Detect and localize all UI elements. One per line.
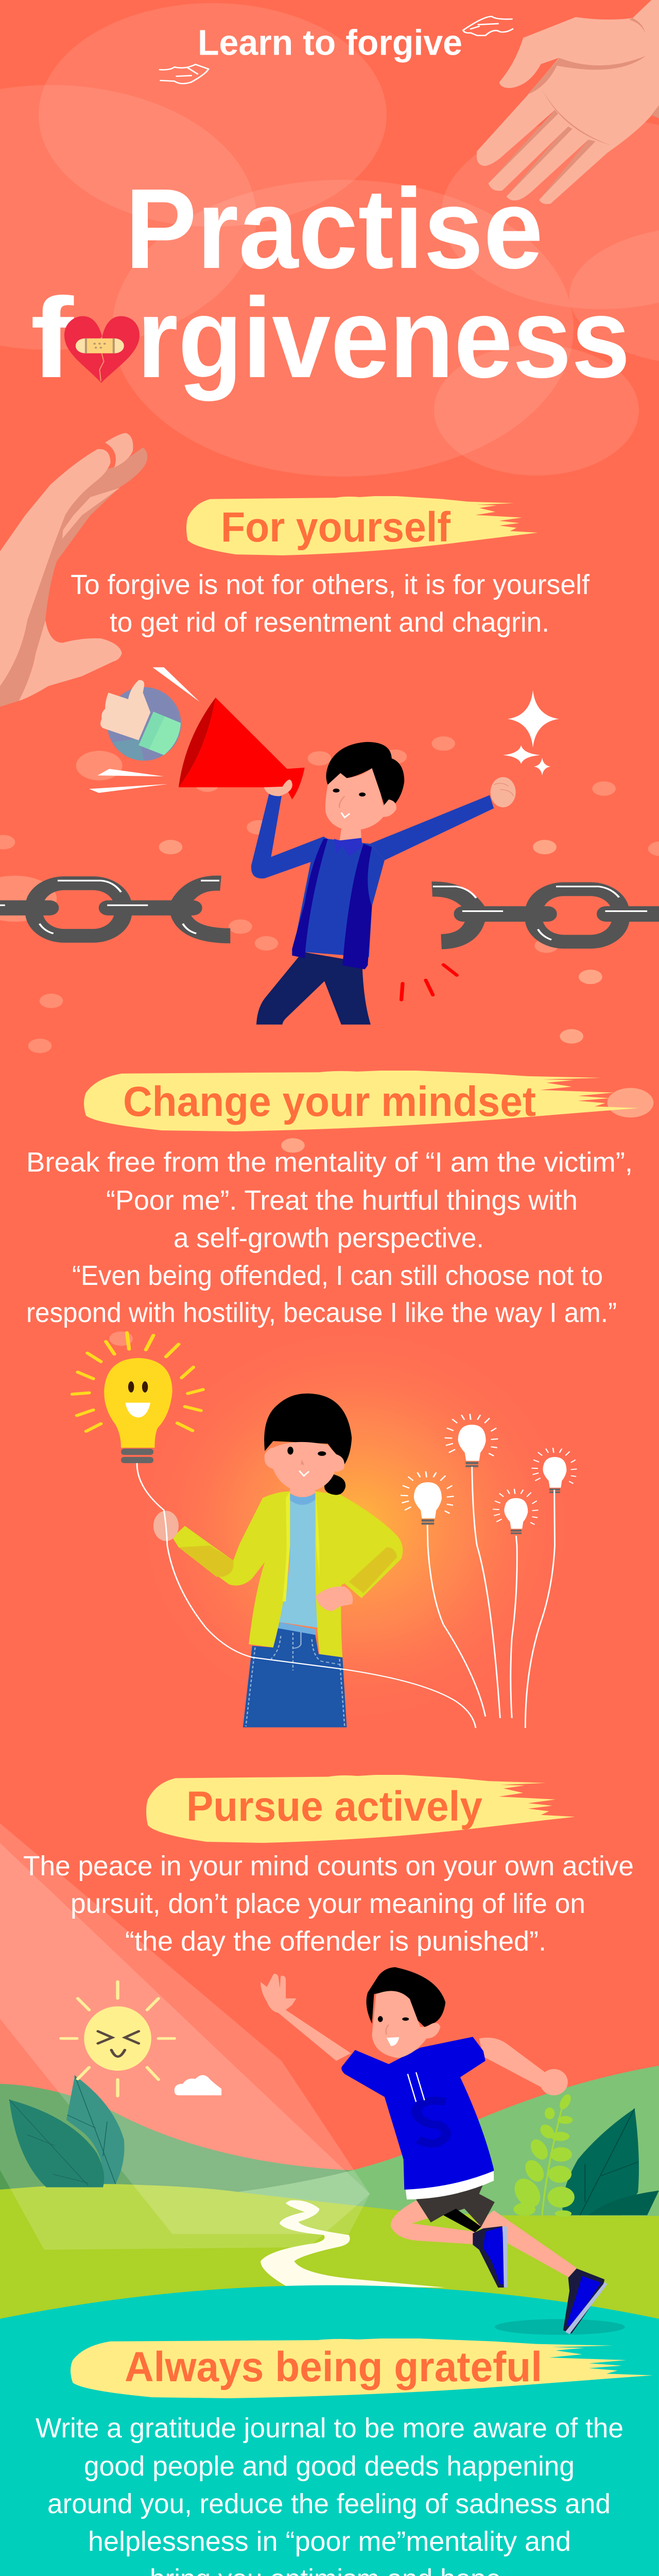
illustration: sparks and stars — [89, 667, 559, 793]
illustration: girl with bulbs — [137, 1394, 555, 1728]
illustration: smiling sun — [61, 1981, 175, 2096]
text: For yourself: To forgive is not for others, it is for yourself — [71, 569, 590, 600]
text: Always being grateful — [36, 2413, 623, 2576]
heading: Always being grateful — [71, 2338, 653, 2398]
title: Practise: Practise — [125, 165, 543, 292]
illustration: thumbs up — [100, 680, 181, 760]
heading: For yourself — [186, 496, 538, 555]
text: Always being grateful: Write a gratitude journal to be more aware of the — [36, 2413, 623, 2444]
illustration: broken chain left — [0, 880, 230, 936]
text: Pursue actively — [23, 1851, 634, 1957]
icon: cloud — [175, 2075, 221, 2095]
icon: right helping hand — [477, 0, 659, 204]
heading: Change your mindset: Change your mindset — [123, 1078, 536, 1125]
icon: smiling light bulb — [72, 1333, 203, 1463]
heading: For yourself: For yourself — [221, 504, 451, 551]
text: Change your mindset: a self-growth perspective. — [174, 1223, 484, 1253]
icon: mended heart — [64, 316, 140, 383]
illustration: running man — [261, 1967, 625, 2335]
text: For yourself — [71, 569, 590, 638]
text: Always being grateful: helplessness in “poor me”mentality and — [88, 2526, 571, 2557]
background: orange glow — [129, 1319, 582, 1731]
icon: small white bulbs — [401, 1414, 577, 1534]
illustration: man with megaphone — [179, 698, 516, 1025]
text: Change your mindset — [26, 1147, 633, 1328]
heading: Pursue actively: Pursue actively — [186, 1783, 482, 1830]
background: translucent ellipses — [0, 3, 659, 477]
text: Change your mindset: “Even being offended, I can still choose not to — [72, 1260, 603, 1291]
text: Change your mindset: “Poor me”. Treat the hurtful things with — [106, 1185, 578, 1216]
heading: Change your mindset — [84, 1071, 639, 1131]
text: Pursue actively: pursuit, don’t place your meaning of life on — [71, 1888, 585, 1919]
heading: Pursue actively — [146, 1775, 575, 1843]
text: Change your mindset: Break free from the mentality of “I am the victim”, — [26, 1147, 633, 1178]
text: Always being grateful: good people and good deeds happening — [84, 2451, 575, 2482]
illustration: sun rays — [0, 1823, 370, 2250]
heading: Always being grateful: Always being grateful — [125, 2344, 542, 2391]
illustration: left leaves — [9, 2076, 124, 2188]
text: Change your mindset: respond with hostility, because I like the way I am.” — [26, 1297, 617, 1328]
illustration: broken chain right — [432, 887, 659, 942]
background: small dots — [0, 736, 659, 1346]
background: teal page — [0, 2285, 659, 2576]
text: Always being grateful: around you, reduce the feeling of sadness and — [47, 2488, 611, 2519]
icon: small hand outlines — [160, 16, 513, 83]
text: Pursue actively: “the day the offender is punished”. — [125, 1926, 546, 1957]
illustration: landscape — [0, 2066, 659, 2333]
text: For yourself: to get rid of resentment and chagrin. — [110, 607, 549, 638]
title: forgiveness: rgiveness — [137, 274, 630, 401]
subtitle: Learn to forgive — [198, 23, 462, 63]
text: Pursue actively: The peace in your mind counts on your own active — [23, 1851, 634, 1882]
title: forgiveness: f — [30, 274, 75, 401]
icon: left hand — [0, 433, 147, 707]
